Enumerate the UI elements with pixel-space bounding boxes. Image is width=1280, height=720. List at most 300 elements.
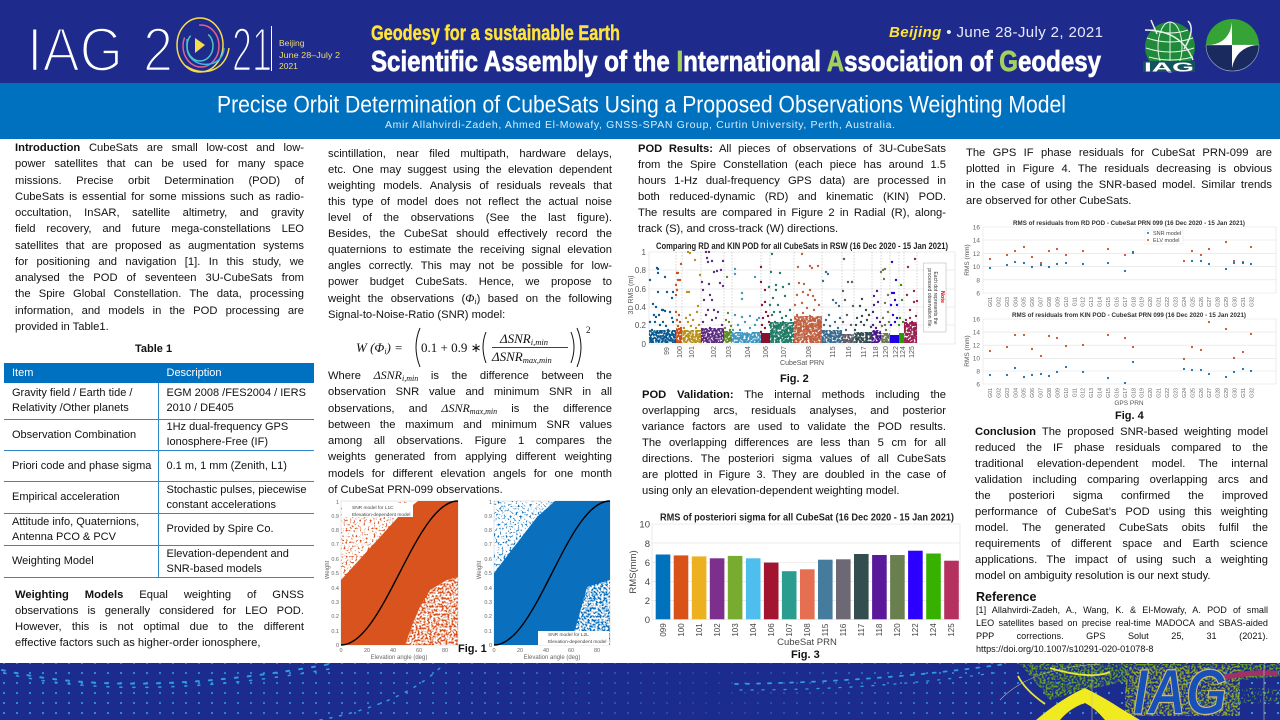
chart: figure 2 scatter: 104 xyxy=(745,346,752,358)
plot: L1C weights: 0.6 xyxy=(331,557,339,563)
decoration: wave streaks xyxy=(2,664,1005,720)
plot: RD POD residuals: G05 xyxy=(1022,297,1028,307)
text block: SNR explanation: observation SNR value and minimum SNR in all xyxy=(328,386,612,398)
plot: L1C weights: 0.4 xyxy=(331,586,339,592)
plot: RD POD residuals: G21 xyxy=(1157,297,1163,307)
chart: figure 3 bar chart: 120 xyxy=(893,623,902,637)
text block: GPS IF residuals: are observed for other CubeSats. xyxy=(966,195,1131,207)
plot: RD POD residuals: RMS of residuals from RD POD - CubeSat PRN 099 (16 Dec 2020 - 15 Jan 2021) xyxy=(1013,220,1245,227)
text block: GPS IF residuals: in the case of using the SNR-based model. Similar trends xyxy=(966,179,1272,191)
formula: SNR weighting model: W (Φ xyxy=(356,340,384,355)
axis labels: 8 xyxy=(645,539,650,550)
text block: introduction: occultation, InSAR, satellite altimetry, and gravity xyxy=(15,207,304,219)
plot: RD POD residuals: G19 xyxy=(1140,297,1146,307)
poster title: Precise Orbit Determination of CubeSats Using a Proposed Observations Weighting Model xyxy=(217,92,1066,118)
chart: figure 3 bar chart: 100 xyxy=(677,623,686,637)
chart: figure 2 scatter: CubeSat PRN xyxy=(780,360,824,367)
plot: KIN POD residuals: G29 xyxy=(1224,388,1230,398)
scatter series xyxy=(649,252,917,343)
plot: RD POD residuals: G18 xyxy=(1131,297,1137,307)
plot: KIN POD residuals: 14 xyxy=(973,330,980,336)
legend: ELV model xyxy=(1153,238,1180,244)
text block: SNR explanation: among all observations. Figure 1 compares the xyxy=(328,435,612,447)
formula: SNR weighting model: 2 xyxy=(586,325,590,335)
formula: SNR weighting model xyxy=(356,325,590,368)
text block: introduction: field recovery, and future mega-constellations LEO xyxy=(15,223,304,235)
text block: conclusion: performance of CubeSat’s POD using this weighting xyxy=(975,506,1268,518)
plot: RD POD residuals: G17 xyxy=(1123,297,1129,307)
bars xyxy=(656,551,959,619)
note box: processed observation file. xyxy=(926,268,932,328)
IAG 2021 logo: 2021 xyxy=(279,61,298,71)
text block: conclusion: reduced the IF phase residuals compared to the xyxy=(975,442,1268,454)
text block: conclusion: Conclusion The proposed SNR-based weighting model xyxy=(975,426,1268,438)
plot: L2L weights: Elevation angle (deg) xyxy=(524,655,580,661)
text block: GPS IF residuals: plotted in Figure 4. The residuals decreasing is obvious xyxy=(966,163,1272,175)
chart: figure 2 scatter: 102 xyxy=(711,346,718,358)
table 1: 0.1 m, 1 mm (Zenith, L1) xyxy=(166,460,287,472)
plot: KIN POD residuals: G16 xyxy=(1114,388,1120,398)
event date: Beijing • June 28-July 2, 2021 xyxy=(889,24,1103,41)
plot: L2L weights: 0.4 xyxy=(484,586,492,592)
caption: fig 1: Fig. 1 xyxy=(458,643,487,655)
axis labels: 6 xyxy=(645,558,650,569)
plot: RD POD residuals: 14 xyxy=(973,238,980,244)
legend: SNR model xyxy=(1153,231,1181,237)
chart: figure 3 bar chart: 125 xyxy=(947,623,956,637)
table 1: Elevation-dependent and xyxy=(166,548,289,560)
chart: figure 2 scatter: 99 xyxy=(664,347,671,355)
plot: RD POD residuals: G22 xyxy=(1165,297,1171,307)
icon: play ring xyxy=(177,18,229,72)
plot: RD POD residuals: G10 xyxy=(1064,297,1070,307)
plot: KIN POD residuals: RMS of residuals from KIN POD - CubeSat PRN 099 (16 Dec 2020 - 15 Jan 2021) xyxy=(1012,312,1246,319)
text block: conclusion: model on ambiguity resolution is our next study. xyxy=(975,570,1210,582)
table 1: 2010 / DE405 xyxy=(166,402,234,414)
chart: figure 3 bar chart: 107 xyxy=(785,623,794,637)
table 1: Relativity /Other planets xyxy=(12,402,129,414)
plot: L2L weights xyxy=(477,500,610,661)
plot: KIN POD residuals: G09 xyxy=(1055,388,1061,398)
plot: RD POD residuals: G11 xyxy=(1072,297,1078,306)
chart: figure 2 scatter: 115 xyxy=(830,346,837,358)
plot: RD POD residuals: G31 xyxy=(1241,297,1247,307)
chart: figure 3 bar chart: 115 xyxy=(821,623,830,636)
text block: POD validation: overlapping arcs, residuals analyses, and posterior xyxy=(642,405,946,417)
plot: L1C weights: 0.2 xyxy=(331,614,339,620)
plot: L1C weights: 0.1 xyxy=(331,629,339,635)
plot: RD POD residuals: G32 xyxy=(1249,297,1255,307)
chart: figure 4 residual plots xyxy=(964,220,1276,407)
chart: figure 3 bar chart: 124 xyxy=(929,623,938,637)
table 1: Ionosphere-Free (IF) xyxy=(166,436,268,448)
IAG 2021 logo: June 28–July 2 xyxy=(279,50,340,60)
plot: RD POD residuals: G12 xyxy=(1081,297,1087,307)
plot: KIN POD residuals: G01 xyxy=(988,388,994,398)
plot: L1C weights: 0.9 xyxy=(331,514,339,520)
axis labels: 2 xyxy=(645,596,650,607)
text block: introduction: CubeSats is essential for some missions such as radio- xyxy=(15,191,304,203)
caption: fig 3: Fig. 3 xyxy=(791,649,820,661)
icon: round compass logo xyxy=(1206,19,1259,71)
plot: KIN POD residuals: G02 xyxy=(996,388,1002,398)
text block: reference entry: [1] Allahvirdi-Zadeh, A., Wang, K. & El-Mowafy, A. POD of small xyxy=(976,605,1268,615)
plot: KIN POD residuals: G23 xyxy=(1174,388,1180,398)
text block: reference entry xyxy=(976,605,1268,654)
text block: weighting models continued: Besides, the CubeSat should effectively record the xyxy=(328,228,612,240)
table 1 xyxy=(4,363,314,578)
plot: KIN POD residuals: G31 xyxy=(1241,388,1247,398)
table 1: Gravity field / Earth tide / xyxy=(12,387,132,399)
formula: SNR weighting model: ΔSNR xyxy=(492,349,523,364)
plot: RD POD residuals: G06 xyxy=(1030,297,1036,307)
text block: weighting models continued xyxy=(328,148,612,321)
plot: L1C weights: 0 xyxy=(339,648,343,654)
chart: figure 2 scatter: 107 xyxy=(781,346,788,358)
tagline: Geodesy for a sustainable Earth xyxy=(371,22,620,45)
plot: L1C weights: SNR model for L1C xyxy=(352,505,394,511)
plot: RD POD residuals: G04 xyxy=(1013,297,1019,307)
plot: KIN POD residuals: G28 xyxy=(1216,388,1222,398)
formula: SNR weighting model: 0.1 + 0.9 ∗ xyxy=(421,340,481,355)
plot: KIN POD residuals: G30 xyxy=(1232,388,1238,398)
plot: L2L weights: 0.9 xyxy=(484,514,492,520)
text block: SNR explanation: Where ΔSNRi,min is the difference between the xyxy=(328,368,612,383)
plot: KIN POD residuals: 8 xyxy=(976,368,980,376)
plot: KIN POD residuals: G19 xyxy=(1140,388,1146,398)
plot: L2L weights: 0 xyxy=(489,643,492,649)
plot: KIN POD residuals: G04 xyxy=(1013,388,1019,398)
chart: figure 3 bar chart: CubeSat PRN xyxy=(777,637,837,648)
note box xyxy=(924,263,946,332)
plot: KIN POD residuals: G25 xyxy=(1190,388,1196,398)
chart: figure 3 bar chart: 104 xyxy=(749,623,758,637)
plot: KIN POD residuals: GPS PRN xyxy=(1114,400,1144,407)
text block: introduction: satellites that are proposed as augmentation systems xyxy=(15,240,304,252)
text block: introduction: for positioning and navigation [1]. In this study, we xyxy=(15,256,304,268)
chart: figure 3 bar chart: 122 xyxy=(911,623,920,637)
assembly title: Scientific Assembly of the International Association of Geodesy xyxy=(371,46,1101,78)
text block: conclusion: model. The generated CubeSats obits fulfil the xyxy=(975,522,1268,534)
plot: RD POD residuals: G08 xyxy=(1047,297,1053,307)
plot: KIN POD residuals: G05 xyxy=(1022,388,1028,398)
chart: figure 1 weight scatter plots xyxy=(325,500,610,661)
plot: RD POD residuals xyxy=(964,220,1276,307)
table 1: Attitude info, Quaternions, xyxy=(12,516,139,528)
plot: L2L weights: 0 xyxy=(492,648,496,654)
plot: RD POD residuals: G01 xyxy=(988,297,994,307)
text block: POD validation: are plotted in Figure 3. They are doubled in the case of xyxy=(642,469,946,481)
chart: figure 2 scatter: 100 xyxy=(677,346,684,358)
plot: KIN POD residuals: G13 xyxy=(1089,388,1095,398)
plot: L2L weights: 40 xyxy=(543,648,549,654)
plot: KIN POD residuals: G20 xyxy=(1148,388,1154,398)
table 1: Weighting Model xyxy=(12,555,94,567)
text block: introduction: the Spire Global Constellation. The data, processing xyxy=(15,288,304,300)
chart: figure 3 bar chart: 102 xyxy=(713,623,722,637)
text block: POD validation: directions. The posteriori sigma values of all CubeSats xyxy=(642,453,946,465)
axis labels xyxy=(639,520,650,626)
heading: reference: Reference xyxy=(976,590,1036,604)
plot: RD POD residuals: G15 xyxy=(1106,297,1112,307)
plot: RD POD residuals: RMS (mm) xyxy=(964,244,971,276)
plot: L2L weights: 0.7 xyxy=(484,542,492,548)
caption: fig 4: Fig. 4 xyxy=(1115,410,1144,422)
plot: KIN POD residuals: G07 xyxy=(1039,388,1045,398)
chart: figure 3 bar chart: 117 xyxy=(857,623,866,636)
plot: L1C weights: 80 xyxy=(442,648,448,654)
caption: fig 2: Fig. 2 xyxy=(780,373,809,385)
plot: L2L weights: Elevation-dependent model xyxy=(548,639,606,645)
text block: reference entry: PPP corrections. GPS Solut 25, 31 (2021). xyxy=(976,631,1268,641)
table 1: Description xyxy=(166,366,222,378)
table caption: Table 1 xyxy=(135,343,172,355)
plot: L2L weights: 0.6 xyxy=(484,557,492,563)
text block: POD results: hours 1-Hz dual-frequency GPS data) are processed in xyxy=(638,175,946,187)
text block: GPS IF residuals xyxy=(966,147,1272,207)
plot: KIN POD residuals: 12 xyxy=(973,342,980,350)
plot: KIN POD residuals: G24 xyxy=(1182,388,1188,398)
text block: weighting models continued: angles correctly. This may not be possible for low- xyxy=(328,260,612,272)
text block: conclusion: traditional elevation-dependent model. The internal xyxy=(975,458,1268,470)
plot: L1C weights: 0 xyxy=(336,643,339,649)
plot: RD POD residuals: G07 xyxy=(1039,297,1045,307)
plot: L1C weights: Weight xyxy=(325,560,331,579)
plot: RD POD residuals: G26 xyxy=(1199,297,1205,307)
axis labels: 0.8 xyxy=(635,266,647,275)
chart: figure 3 bar chart xyxy=(628,512,960,648)
plot: L2L weights: SNR model for L2L xyxy=(548,632,589,638)
text block: weighting models continued: level of the observations (See the last figure). xyxy=(328,212,612,224)
table 1: constant accelerations xyxy=(166,498,276,510)
chart: figure 2 scatter: 103 xyxy=(726,346,733,358)
axis labels: 0.4 xyxy=(635,303,647,312)
text block: introduction: analysed the POD of seventeen 3U-CubeSats from xyxy=(15,272,304,284)
chart: figure 2 scatter xyxy=(628,241,956,367)
text block: conclusion xyxy=(975,426,1268,582)
text block: POD results: The results are compared in Figure 2 in Radial (R), along- xyxy=(638,207,946,219)
note box: Note xyxy=(939,291,945,303)
text block: introduction: Introduction CubeSats are small low-cost and low- xyxy=(15,142,304,154)
text block: SNR explanation: models for different elevation angels for one month xyxy=(328,468,612,480)
text block: weighting models continued: quaternions to estimate the receiving signal elevation xyxy=(328,244,612,256)
plot: RD POD residuals: G20 xyxy=(1148,297,1154,307)
text block: conclusion: applications. The impact of using such a weighting xyxy=(975,554,1268,566)
axis labels: 0.6 xyxy=(635,285,647,294)
text block: weighting models continued: this type of model does not reflect the actual noise xyxy=(328,196,612,208)
plot: KIN POD residuals: G12 xyxy=(1081,388,1087,398)
text block: SNR explanation: between the maximum and minimum SNR values xyxy=(328,419,612,431)
plot: RD POD residuals: G25 xyxy=(1190,297,1196,307)
chart: figure 3 bar chart: 118 xyxy=(875,623,884,636)
plot: L2L weights: 0.3 xyxy=(484,600,492,606)
table 1: SNR-based models xyxy=(166,562,262,574)
plot: RD POD residuals: 12 xyxy=(973,251,980,258)
axis labels: 4 xyxy=(645,577,650,588)
decoration: swirl xyxy=(1000,664,1280,720)
text block: GPS IF residuals: The GPS IF phase residuals for CubeSat PRN-099 are xyxy=(966,147,1272,159)
text block: introduction xyxy=(15,142,304,333)
plot: RD POD residuals: G29 xyxy=(1224,297,1230,307)
text block: POD results: POD Results: All pieces of observations of 3U-CubeSats xyxy=(638,143,946,155)
plot: KIN POD residuals: G10 xyxy=(1064,388,1070,398)
plot: L2L weights: 0.2 xyxy=(484,614,492,620)
chart: figure 2 scatter: 108 xyxy=(806,346,813,358)
text block: SNR explanation: of CubeSat PRN-099 observations. xyxy=(328,484,503,496)
axis labels: 0 xyxy=(645,615,650,626)
table 1: Priori code and phase sigma xyxy=(12,460,151,472)
plot: KIN POD residuals: G17 xyxy=(1123,388,1129,398)
axis labels: 0 xyxy=(642,340,647,349)
text block: POD validation: The overlapping differences are less than 5 cm for all xyxy=(642,437,946,449)
plot: RD POD residuals: G03 xyxy=(1005,297,1011,307)
plot: RD POD residuals: G24 xyxy=(1182,297,1188,307)
plot: L1C weights: Elevation-dependent model xyxy=(352,512,410,518)
plot: RD POD residuals: 8 xyxy=(976,278,980,284)
plot: KIN POD residuals: G14 xyxy=(1098,388,1104,398)
chart: figure 2 scatter: 124 xyxy=(900,346,907,358)
chart: figure 2 scatter: 101 xyxy=(689,346,696,358)
plot: L1C weights: 1 xyxy=(336,500,339,506)
plot: RD POD residuals: G09 xyxy=(1055,297,1061,307)
plot: RD POD residuals: G16 xyxy=(1114,297,1120,307)
table 1: Item xyxy=(12,366,33,378)
table 1: EGM 2008 /FES2004 / IERS xyxy=(166,387,306,399)
plot: L2L weights: 0.1 xyxy=(484,629,492,635)
plot: L2L weights: 1 xyxy=(489,500,492,506)
plot: L2L weights: 0.8 xyxy=(484,528,492,534)
text block: POD validation: variance factors are used to validate the POD results. xyxy=(642,421,946,433)
plot: RD POD residuals: G23 xyxy=(1174,297,1180,307)
icon: IAG globe logo xyxy=(1143,20,1195,74)
text block: introduction: information, and models in the POD processing are xyxy=(15,305,304,317)
plot: KIN POD residuals: G32 xyxy=(1249,388,1255,398)
chart: figure 2 scatter: 125 xyxy=(909,346,916,358)
axis labels: 0.2 xyxy=(635,321,647,330)
formula: SNR weighting model: ΔSNR xyxy=(500,331,531,346)
formula: SNR weighting model: i,min xyxy=(531,337,548,347)
plot: KIN POD residuals: G11 xyxy=(1072,388,1078,397)
chart: figure 3 bar chart: 101 xyxy=(695,623,704,637)
axis labels: 1 xyxy=(642,248,647,257)
plot: KIN POD residuals: G03 xyxy=(1005,388,1011,398)
text block: POD results: track (S), and cross-track (W) directions. xyxy=(638,223,838,235)
plot: KIN POD residuals: G27 xyxy=(1207,388,1213,398)
text block: conclusion: the posteriori sigma confirmed the improved xyxy=(975,490,1268,502)
plot: L2L weights: 60 xyxy=(568,648,574,654)
table 1: Antenna PCO & PCV xyxy=(12,530,116,542)
plot: RD POD residuals: G14 xyxy=(1098,297,1104,307)
formula: SNR weighting model: ) = xyxy=(386,340,403,355)
plot: RD POD residuals: G13 xyxy=(1089,297,1095,307)
plot: L1C weights: Elevation angle (deg) xyxy=(371,655,427,661)
plot: RD POD residuals: 16 xyxy=(973,224,980,232)
plot: L1C weights: 0.7 xyxy=(331,542,339,548)
text block: weighting models xyxy=(15,589,304,649)
authors: Amir Allahvirdi-Zadeh, Ahmed El-Mowafy, GNSS-SPAN Group, Curtin University, Perth, Australia. xyxy=(385,119,895,131)
chart: figure 3 bar chart: 108 xyxy=(803,623,812,637)
plot: KIN POD residuals: G18 xyxy=(1131,388,1137,398)
text block: introduction: provided in Table1. xyxy=(15,321,109,333)
plot: RD POD residuals: G28 xyxy=(1216,297,1222,307)
plot: RD POD residuals: 6 xyxy=(976,290,980,298)
IAG 2021 logo: IAG xyxy=(27,16,123,85)
text block: POD results xyxy=(638,143,946,235)
table 1: Stochastic pulses, piecewise xyxy=(166,484,307,496)
formula: SNR weighting model: max,min xyxy=(523,355,552,365)
plot: KIN POD residuals: RMS (mm) xyxy=(964,335,971,367)
plot: KIN POD residuals: G15 xyxy=(1106,388,1112,398)
plot: KIN POD residuals: 6 xyxy=(976,382,980,388)
plot: L1C weights xyxy=(325,500,458,661)
chart: figure 2 scatter: 117 xyxy=(861,346,868,358)
axis labels: 10 xyxy=(639,520,650,530)
text block: weighting models: observations is generally considered for LEO POD. xyxy=(15,605,304,617)
IAG 2021 logo: 21 xyxy=(232,16,272,85)
chart: figure 2 scatter: 118 xyxy=(873,346,880,358)
chart: figure 3 bar chart: 099 xyxy=(659,623,668,637)
formula: SNR weighting model: i xyxy=(384,347,387,356)
chart: figure 2 scatter: 120 xyxy=(883,346,890,358)
plot: L1C weights: 0.5 xyxy=(331,571,339,577)
text block: reference entry: LEO satellites based on precise real-time MADOCA and SBAS-aided xyxy=(976,618,1268,628)
table 1: Provided by Spire Co. xyxy=(166,523,274,535)
chart: figure 2 scatter: 3D RMS (m) xyxy=(628,276,635,314)
text block: conclusion: requirements of different space and Earth science xyxy=(975,538,1268,550)
text block: reference entry: https://doi.org/10.1007/s10291-020-01078-8 xyxy=(976,644,1153,654)
plot: KIN POD residuals: G08 xyxy=(1047,388,1053,398)
plot: L1C weights: 40 xyxy=(390,648,396,654)
footer banner xyxy=(0,663,1280,720)
plot: KIN POD residuals: G22 xyxy=(1165,388,1171,398)
plot: KIN POD residuals: G21 xyxy=(1157,388,1163,398)
text block: POD validation: using only an elevation-dependent weighting model. xyxy=(642,485,900,497)
text block: weighting models continued: scintillation, near filed multipath, hardware delays, xyxy=(328,148,612,160)
text block: weighting models continued: weighting models. Analysis of residuals reveals that xyxy=(328,180,612,192)
plot: L1C weights: 0.3 xyxy=(331,600,339,606)
text block: introduction: power satellites that can be used for many space xyxy=(15,158,304,170)
text block: weighting models: Weighting Models Equal weighting of GNSS xyxy=(15,589,304,601)
plot: RD POD residuals: G30 xyxy=(1232,297,1238,307)
text block: SNR explanation xyxy=(328,368,612,496)
text block: POD validation: POD Validation: The internal methods including the xyxy=(642,389,946,401)
title band xyxy=(0,83,1280,139)
plot: KIN POD residuals xyxy=(964,312,1276,407)
header banner xyxy=(0,0,1280,139)
text block: weighting models continued: power budget CubeSats. Hence, we propose to xyxy=(328,276,612,288)
table 1: Empirical acceleration xyxy=(12,491,120,503)
IAG 2021 logo: Beijing xyxy=(279,38,305,48)
chart: figure 2 scatter: 116 xyxy=(846,346,853,358)
plot: RD POD residuals: G27 xyxy=(1207,297,1213,307)
plot: L1C weights: 20 xyxy=(364,648,370,654)
text block: weighting models: However, this is not optimal due to the different xyxy=(15,621,304,633)
plot: L2L weights: Weight xyxy=(477,560,483,579)
IAG 2021 logo: 2 xyxy=(143,16,173,85)
text block: weighting models continued: weight the observations (Φi) based on the following xyxy=(328,291,612,306)
plot: L1C weights: 0.8 xyxy=(331,528,339,534)
text block: weighting models continued: Signal-to-Noise-Ratio (SNR) model: xyxy=(328,309,505,321)
plot: L2L weights: 80 xyxy=(594,648,600,654)
text block: introduction: missions. Precise orbit Determination (POD) of xyxy=(15,175,304,187)
text block: POD validation xyxy=(642,389,946,497)
text block: conclusion: validation including comparing overlapping arcs and xyxy=(975,474,1268,486)
chart: figure 3 bar chart: RMS(mm) xyxy=(628,550,639,594)
plot: L1C weights: 60 xyxy=(416,648,422,654)
chart: figure 3 bar chart: 116 xyxy=(839,623,848,636)
icon: IAG globe logo: IAG xyxy=(1144,60,1194,74)
axis labels xyxy=(635,248,647,349)
